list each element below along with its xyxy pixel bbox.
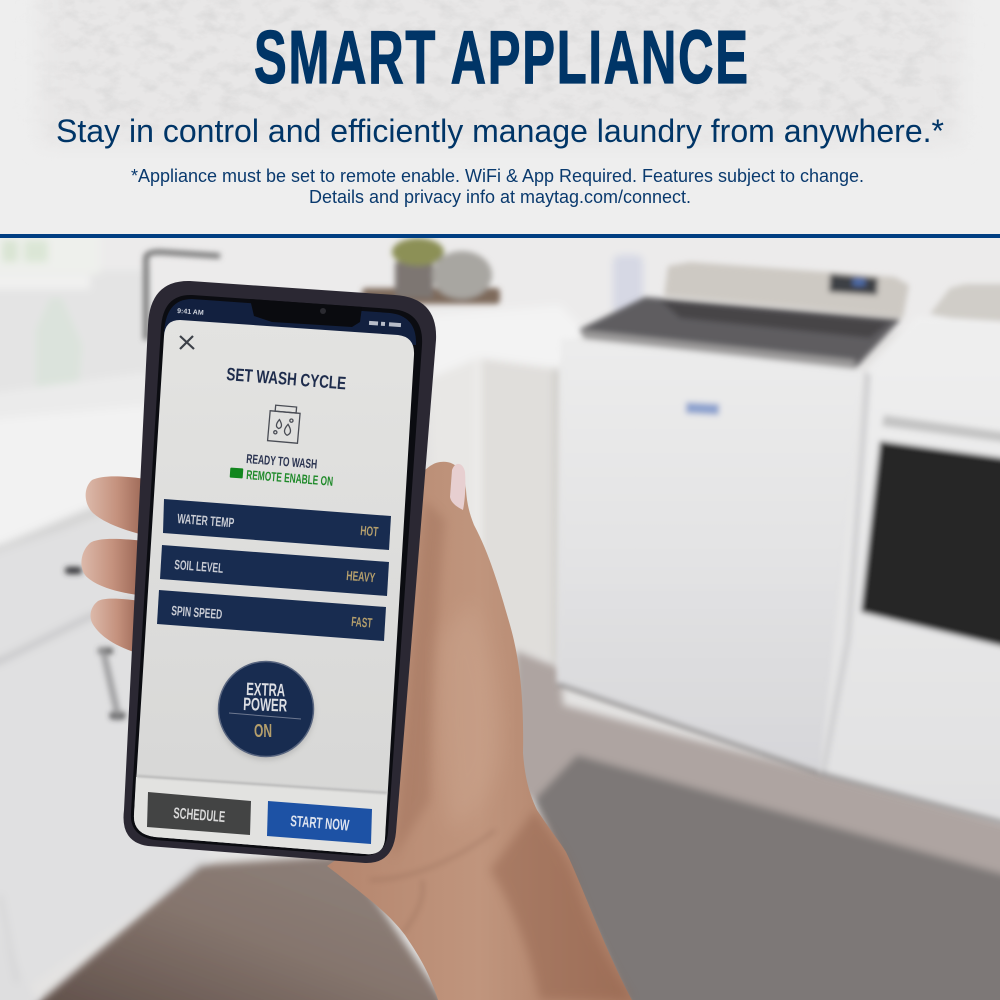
camera dot	[320, 308, 326, 314]
phone body	[124, 281, 436, 863]
washer front	[557, 338, 865, 771]
bottom action bar: START NOW	[290, 813, 350, 835]
washer logo	[686, 402, 719, 415]
window	[0, 232, 100, 274]
wrist shadow	[490, 810, 632, 1000]
row: spin speed	[157, 590, 386, 641]
screen heading: SET WASH CYCLE	[226, 364, 347, 393]
bottom action bar: SCHEDULE	[173, 805, 226, 826]
bottle	[36, 298, 82, 392]
washer lid	[580, 297, 901, 369]
header band	[0, 0, 1000, 238]
hand shadow near phone	[392, 500, 445, 860]
photo: blurred laundry room background	[0, 232, 1000, 1000]
bottom action bar	[134, 776, 387, 854]
row: spin speed: FAST	[351, 614, 373, 631]
washer base shadow	[558, 684, 820, 773]
hand highlight	[438, 600, 501, 830]
remote enable text: REMOTE ENABLE ON	[246, 467, 334, 489]
washer display	[829, 274, 878, 295]
status bar	[164, 299, 416, 345]
title: SMART APPLIANCE	[254, 15, 748, 100]
floor bottom left	[30, 855, 450, 1000]
vase	[613, 255, 643, 315]
finger 1	[86, 476, 165, 540]
notch	[250, 299, 362, 327]
footnote: Details and privacy info at maytag.com/connect.	[309, 187, 691, 207]
status time: 9:41 AM	[177, 308, 204, 317]
schedule button	[147, 792, 251, 835]
subtitle: Stay in control and efficiently manage laundry from anywhere.*	[56, 113, 944, 149]
thumbnail	[450, 464, 465, 510]
extra power button	[218, 662, 314, 760]
dryer window	[861, 441, 1000, 648]
row: water temp: HOT	[360, 523, 379, 539]
washer console	[664, 262, 909, 318]
blue divider line	[0, 234, 1000, 238]
rug	[534, 755, 1000, 1000]
start now button	[267, 801, 372, 844]
extra power button: ON	[254, 721, 272, 741]
washer	[557, 262, 909, 773]
hand: palm and wrist	[81, 462, 632, 1000]
row: soil level: SOIL LEVEL	[174, 557, 224, 576]
icon: washer with water drops	[268, 405, 301, 443]
row: water temp	[163, 499, 391, 550]
row: spin speed: SPIN SPEED	[171, 603, 223, 622]
close icon	[180, 336, 194, 349]
row: soil level: HEAVY	[346, 568, 376, 585]
extra power button: POWER	[243, 694, 288, 716]
dryer	[820, 284, 1000, 826]
extra power button: EXTRA	[246, 679, 286, 700]
countertop left	[0, 378, 150, 548]
counter behind	[430, 305, 585, 380]
screen	[134, 320, 414, 854]
row: water temp: WATER TEMP	[177, 511, 235, 530]
floor right	[515, 650, 1000, 890]
finger 2	[81, 539, 160, 597]
cabinet handles	[65, 567, 82, 574]
status icons	[369, 321, 401, 327]
row: soil level	[160, 545, 389, 596]
phone	[124, 281, 436, 863]
faucet	[146, 252, 220, 340]
plant and tray	[362, 288, 500, 304]
ready to wash: READY TO WASH	[246, 451, 318, 472]
phone bezel	[131, 295, 422, 856]
footnote	[131, 166, 864, 207]
wrist crease	[370, 830, 495, 933]
dryer handle	[882, 415, 1000, 443]
finger 3	[91, 599, 158, 658]
wall	[0, 232, 1000, 332]
remote enable badge	[230, 468, 243, 478]
lower cabinets left	[0, 500, 210, 1000]
footnote: *Appliance must be set to remote enable. WiFi & App Required. Features subject to change.	[131, 166, 864, 186]
